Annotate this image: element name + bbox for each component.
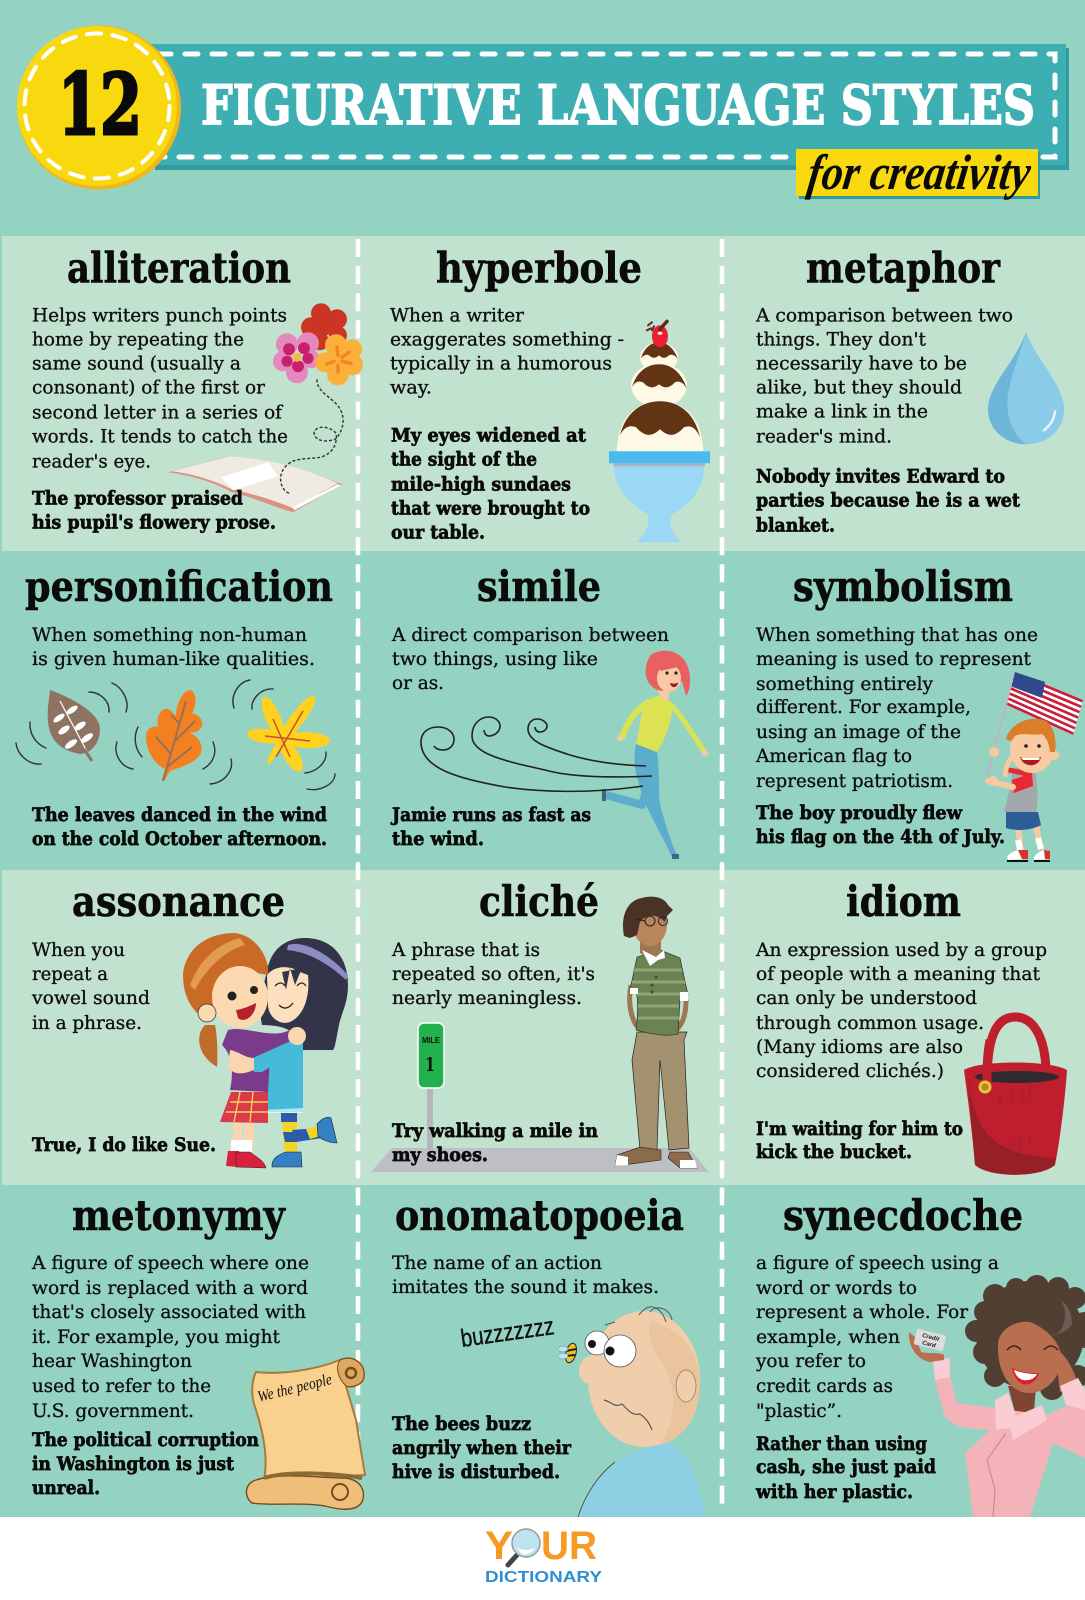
example text: The bees buzz (392, 1413, 531, 1435)
example text (392, 1120, 598, 1166)
definition text: alike, but they should (756, 376, 962, 398)
definition text: make a link in the (756, 400, 928, 422)
example text: My eyes widened at (391, 424, 586, 446)
example text (32, 487, 276, 533)
card label second line: Card (921, 1340, 936, 1349)
illustration: woman holding credit card (909, 1275, 1085, 1517)
panel: metonymy (31, 1191, 365, 1509)
example text: True, I do like Sue. (32, 1134, 216, 1156)
definition text: A comparison between two (755, 304, 1013, 326)
definition text: words. It tends to catch the (32, 425, 288, 447)
definition text: typically in a humorous (390, 352, 612, 374)
definition text: "plastic”. (756, 1400, 842, 1422)
panel: synecdoche (755, 1191, 1085, 1517)
definition text: home by repeating the (32, 328, 244, 350)
definition text: in a phrase. (32, 1012, 142, 1034)
logo: YourDictionary: DICTIONARY (485, 1569, 602, 1586)
example text: cash, she just paid (756, 1456, 936, 1478)
example text: his flag on the 4th of July. (756, 826, 1005, 848)
definition text: example, when (756, 1326, 900, 1348)
definition text: An expression used by a group (755, 939, 1047, 961)
heading: idiom: idiom (846, 877, 961, 926)
definition text (31, 1252, 309, 1422)
definition text: or as. (392, 672, 444, 694)
heading: metaphor: metaphor (806, 243, 1001, 292)
panel: metaphor (755, 243, 1064, 536)
heading: alliteration: alliteration (67, 243, 291, 292)
example text: my shoes. (392, 1144, 488, 1166)
example text: Try walking a mile in (392, 1120, 598, 1142)
definition text: can only be understood (756, 987, 977, 1009)
definition text: When a writer (390, 304, 525, 326)
definition text: reader's eye. (32, 450, 151, 472)
card label: Credit (921, 1333, 941, 1343)
dashed column dividers (358, 239, 722, 1506)
definition text (392, 1252, 659, 1298)
definition text: two things, using like (392, 648, 598, 670)
definition text: nearly meaningless. (392, 987, 582, 1009)
illustration: dancing leaves (16, 680, 335, 790)
example text: I'm waiting for him to (756, 1118, 963, 1140)
definition text: way. (390, 376, 432, 398)
definition text: Helps writers punch points (32, 304, 287, 326)
definition text: different. For example, (756, 696, 971, 718)
example text: unreal. (32, 1477, 100, 1499)
definition text (755, 624, 1038, 792)
definition text: considered clichés.) (756, 1060, 944, 1082)
illustration: two girls hugging (183, 933, 348, 1168)
example text: in Washington is just (32, 1453, 234, 1475)
definition text: (Many idioms are also (756, 1036, 963, 1058)
example text: kick the bucket. (756, 1141, 912, 1163)
heading: personification: personification (25, 562, 333, 611)
definition text: When something that has one (756, 624, 1038, 646)
example text (756, 802, 1005, 848)
example text (755, 1433, 936, 1503)
definition text: American flag to (755, 745, 912, 767)
definition text: credit cards as (756, 1375, 893, 1397)
example text (392, 1413, 572, 1483)
definition text (31, 939, 150, 1034)
definition text: word or words to (756, 1277, 917, 1299)
heading: simile: simile (477, 562, 601, 611)
example text: the sight of the (391, 448, 537, 470)
definition text (755, 1252, 999, 1422)
definition text: you refer to (755, 1350, 866, 1372)
header banner (149, 44, 1069, 170)
definition text: A phrase that is (391, 939, 540, 961)
tag: for creativity: for creativity (804, 144, 1035, 200)
definition text: imitates the sound it makes. (392, 1276, 659, 1298)
example text: with her plastic. (755, 1481, 913, 1503)
definition text: U.S. government. (32, 1400, 194, 1422)
definition text: exaggerates something - (390, 328, 624, 350)
definition text: a figure of speech using a (756, 1252, 999, 1274)
definition text: using an image of the (756, 721, 961, 743)
panel backgrounds: light rows (2, 236, 1085, 1185)
definition text: of people with a meaning that (756, 963, 1040, 985)
definition text (32, 624, 315, 670)
example text: the wind. (392, 828, 484, 850)
panel: cliché (371, 877, 709, 1172)
heading: cliché: cliché (479, 877, 599, 926)
illustration: boy with American flag (987, 672, 1083, 862)
example text: Jamie runs as fast as (390, 804, 591, 826)
logo: YourDictionary: Y (485, 1524, 513, 1568)
definition text: necessarily have to be (756, 352, 967, 374)
definition text: hear Washington (32, 1350, 192, 1372)
example text: The political corruption (32, 1429, 259, 1451)
example text (756, 465, 1020, 536)
illustration: mile sign and road: 1 (425, 1054, 435, 1076)
illustration: standing man (615, 897, 697, 1168)
panel: hyperbole (390, 243, 710, 543)
logo: YourDictionary: UR (541, 1524, 597, 1568)
example text: that were brought to (391, 497, 590, 519)
definition text: vowel sound (31, 987, 150, 1009)
panel: alliteration (32, 243, 363, 533)
definition text (390, 304, 624, 398)
panel: idiom (755, 877, 1067, 1175)
illustration: We the people scroll (246, 1358, 365, 1509)
definition text: repeated so often, it's (392, 963, 595, 985)
definition text: reader's mind. (756, 425, 892, 447)
example text: his pupil's flowery prose. (32, 511, 276, 533)
logo: YourDictionary (485, 1524, 602, 1586)
definition text (391, 624, 669, 694)
definition text: A direct comparison between (391, 624, 669, 646)
example text: angrily when their (392, 1437, 572, 1459)
definition text: is given human-like qualities. (32, 648, 315, 670)
example text: The leaves danced in the wind (32, 804, 327, 826)
example text (32, 1429, 259, 1499)
illustration: mile sign and road (371, 1023, 709, 1172)
heading: assonance: assonance (72, 877, 285, 926)
definition text: repeat a (32, 963, 108, 985)
definition text: second letter in a series of (32, 401, 284, 423)
panel: personification (16, 562, 335, 850)
example text: on the cold October afternoon. (32, 828, 327, 850)
example text: blanket. (756, 514, 835, 536)
definition text (755, 939, 1047, 1082)
definition text (32, 304, 288, 472)
definition text: something entirely (756, 673, 933, 695)
definition text: When something non-human (32, 624, 307, 646)
definition text: used to refer to the (32, 1375, 211, 1397)
badge: 12: 12 (58, 55, 142, 154)
illustration: running woman and wind (421, 651, 708, 859)
example text: Rather than using (756, 1433, 927, 1455)
heading: metonymy: metonymy (72, 1191, 286, 1240)
illustration: red bucket (964, 1017, 1067, 1175)
example text: mile-high sundaes (391, 473, 571, 495)
illustration: water drop (988, 331, 1064, 444)
definition text: represent patriotism. (756, 770, 953, 792)
example text: The professor praised (32, 487, 243, 509)
definition text: represent a whole. For (756, 1301, 969, 1323)
panel: symbolism (755, 562, 1083, 862)
example text (391, 424, 590, 543)
definition text: through common usage. (756, 1012, 984, 1034)
illustration: ice cream sundae (609, 321, 710, 542)
example text: Nobody invites Edward to (756, 465, 1005, 487)
heading: synecdoche: synecdoche (783, 1191, 1023, 1240)
example text (756, 1118, 963, 1163)
definition text: that's closely associated with (32, 1301, 306, 1323)
definition text: word is replaced with a word (32, 1277, 308, 1299)
definition text (391, 939, 595, 1009)
scroll text: We the people (256, 1371, 334, 1406)
panel: onomatopoeia (392, 1191, 705, 1517)
definition text: A figure of speech where one (31, 1252, 309, 1274)
illustration: mile sign and road: MILE (422, 1036, 441, 1045)
heading: onomatopoeia: onomatopoeia (395, 1191, 684, 1240)
illustration: man with bee on nose (459, 1307, 705, 1517)
example text: parties because he is a wet (756, 489, 1020, 511)
definition text: The name of an action (392, 1252, 602, 1274)
panel: simile (390, 562, 708, 859)
heading: hyperbole: hyperbole (436, 243, 642, 292)
example text: The boy proudly flew (756, 802, 963, 824)
example text (32, 804, 327, 850)
definition text: things. They don't (756, 328, 926, 350)
heading: symbolism: symbolism (793, 562, 1013, 611)
definition text: same sound (usually a (32, 352, 241, 374)
badge: 12 (17, 26, 181, 190)
example text: our table. (391, 521, 485, 543)
definition text: meaning is used to represent (756, 648, 1031, 670)
definition text: consonant) of the first or (32, 376, 266, 398)
example text: hive is disturbed. (392, 1461, 560, 1483)
example text (390, 804, 591, 850)
definition text: When you (32, 939, 125, 961)
illustration: flowers and book (168, 303, 363, 512)
bee (558, 1342, 578, 1364)
buzz sound text: buzzzzzzz (459, 1312, 556, 1353)
definition text (755, 304, 1013, 447)
definition text: it. For example, you might (32, 1326, 280, 1348)
panel: assonance (31, 877, 348, 1168)
